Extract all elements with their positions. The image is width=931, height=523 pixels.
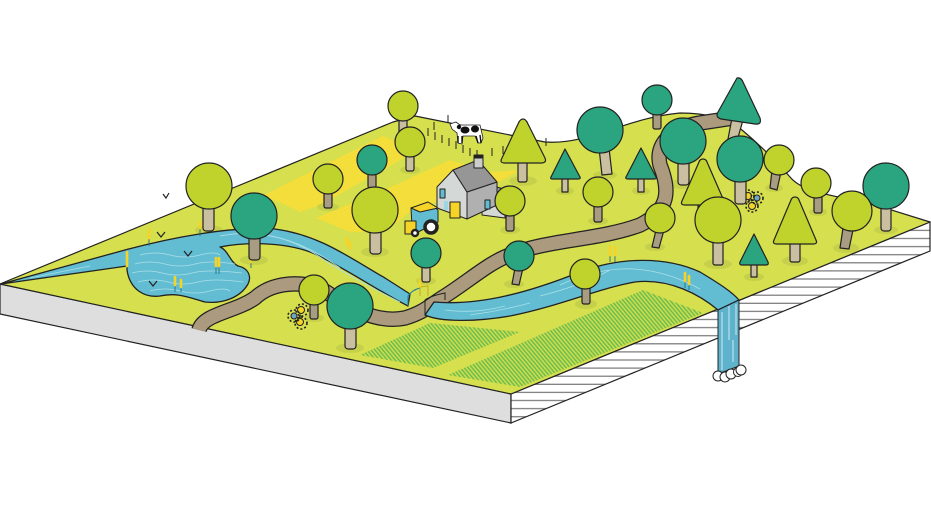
river and pond: [1, 229, 739, 320]
reeds: [127, 222, 689, 287]
round tree 9: [411, 238, 441, 282]
round tree 8: [495, 186, 525, 231]
flower right: [742, 190, 763, 212]
round tree 2: [388, 91, 418, 132]
triangle tree 4: [681, 159, 725, 222]
trees: [186, 78, 909, 349]
round tree 16: [577, 107, 623, 175]
round tree 22: [801, 168, 831, 213]
triangle tree 3: [626, 148, 656, 192]
tree ground shadows: [195, 166, 898, 353]
round tree 4: [357, 145, 387, 188]
round tree 17: [642, 85, 672, 129]
side: right strata: [511, 222, 930, 423]
brown path: [199, 118, 733, 330]
crop field left: [360, 323, 520, 368]
round tree 1: [186, 163, 232, 231]
round tree 12: [645, 203, 675, 248]
bridge: [408, 286, 445, 315]
crop field right: [448, 290, 703, 387]
flower left: [288, 304, 308, 329]
fence: [428, 115, 546, 158]
side: left: [0, 284, 511, 423]
house: [437, 155, 507, 219]
yellow fields: [264, 136, 520, 232]
triangle tree 2: [551, 149, 580, 192]
waterfall: [718, 300, 739, 374]
round tree 19: [717, 136, 763, 204]
triangle tree 5: [717, 78, 760, 141]
round tree 15: [327, 283, 373, 349]
triangle tree 1: [501, 119, 546, 182]
round tree 5: [313, 164, 343, 208]
round tree 13: [570, 259, 600, 304]
triangle tree 6: [773, 197, 817, 262]
water ripples: [30, 233, 700, 315]
reed stems: [127, 228, 689, 292]
river after bridge: [425, 260, 739, 320]
round tree 6: [352, 187, 398, 254]
ground surface: [0, 113, 930, 394]
triangle tree 7: [740, 234, 768, 277]
round tree 21: [695, 197, 741, 265]
tractor: [405, 202, 438, 236]
round tree 3: [395, 127, 425, 171]
round tree 18: [660, 118, 706, 185]
round tree 20: [764, 145, 794, 190]
round tree 23: [863, 163, 909, 231]
round tree 7: [231, 193, 277, 260]
round tree 24: [832, 191, 872, 249]
round tree 10: [504, 241, 534, 285]
cow: [450, 122, 483, 144]
foam: [713, 365, 746, 382]
round tree 11: [583, 177, 613, 222]
round tree 14: [299, 275, 329, 319]
birds: [149, 193, 192, 286]
